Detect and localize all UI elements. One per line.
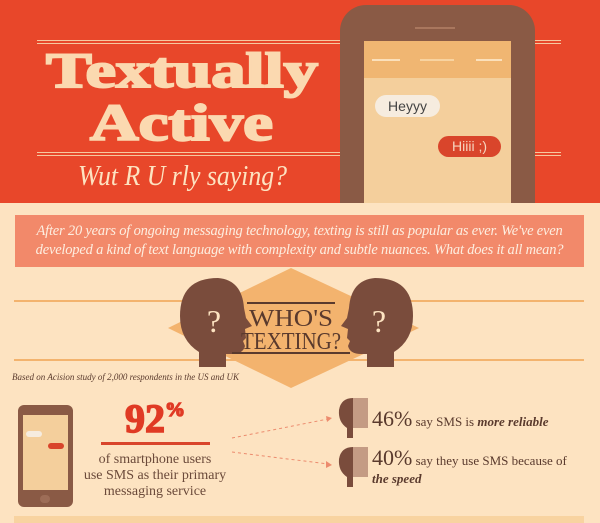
right head: ?	[372, 303, 386, 339]
source note: Based on Acision study of 2,000 respondents in the US and UK	[12, 372, 239, 382]
stat: 40%: the speed	[372, 471, 421, 486]
right head	[341, 278, 413, 367]
bubble: Hiiii: Hiiii ;)	[452, 138, 487, 154]
section heading: who's texting: TEXTING?	[241, 329, 341, 355]
phone illustration	[340, 5, 535, 203]
stat: 92%	[84, 396, 226, 499]
bottom band	[14, 516, 584, 523]
small phone icon	[18, 405, 73, 507]
screen	[364, 41, 511, 203]
section heading: who's texting: WHO'S	[249, 306, 333, 332]
title: Wut R U rly saying?	[78, 161, 287, 192]
bubble: Hiiii	[438, 136, 501, 157]
title: Active	[90, 95, 273, 152]
stat: 40%	[338, 445, 567, 487]
stat: 46%: 46% say SMS is more reliable	[372, 406, 548, 431]
title	[46, 42, 319, 192]
intro text box	[15, 215, 584, 267]
section heading: who's texting	[14, 268, 584, 388]
arrows	[232, 416, 332, 468]
stat: 40%: 40% say they use SMS because of	[372, 445, 567, 470]
stat: 92%: 92%	[125, 396, 185, 441]
stat: 92%: of smartphone users	[99, 452, 211, 467]
bubble: Heyyy: Heyyy	[388, 98, 427, 114]
left head: ?	[207, 303, 221, 339]
header band	[0, 0, 600, 203]
stat: 46%	[338, 398, 548, 438]
stat: 92%: messaging service	[104, 484, 206, 499]
stat: 92%: use SMS as their primary	[84, 468, 226, 483]
intro text box: developed a kind of text language with complexity and subtle nuances. What does it all mean?	[36, 242, 563, 258]
intro text box: After 20 years of ongoing messaging technology, texting is still as popular as ever. We've even	[36, 223, 563, 239]
title: Textually	[46, 42, 318, 98]
decorative double lines	[37, 40, 561, 44]
bubble: Heyyy	[375, 95, 440, 117]
left head	[180, 278, 252, 367]
